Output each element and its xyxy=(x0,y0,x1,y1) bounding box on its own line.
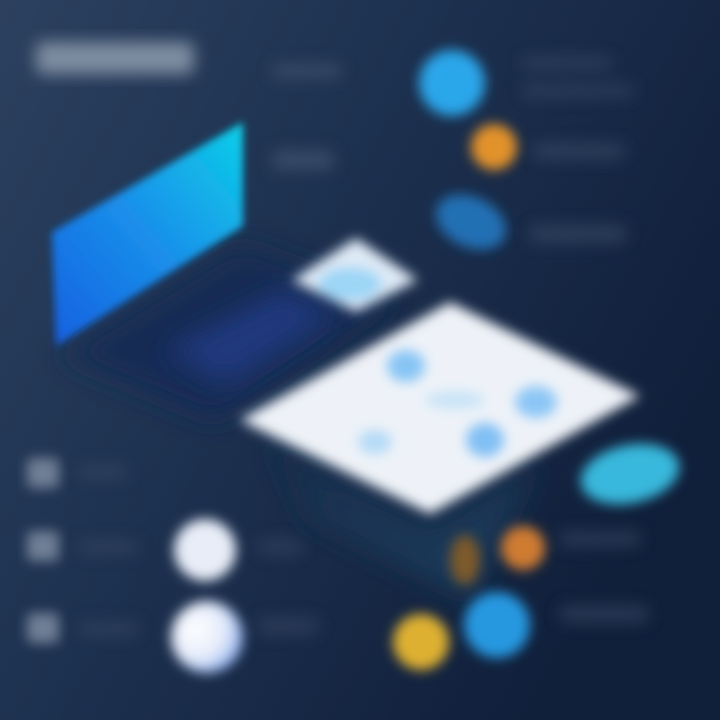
faint labels: upper middle xyxy=(272,64,342,170)
icon: blue ellipse xyxy=(427,184,515,260)
left icon squares xyxy=(27,458,59,643)
faint labels: lower right xyxy=(560,532,648,622)
title block xyxy=(36,42,194,74)
icon: orange circle xyxy=(471,124,517,170)
icon: blue circle xyxy=(419,50,485,116)
icon: dark orange bar xyxy=(450,535,480,585)
icon: orange circle lower xyxy=(501,526,545,570)
icon: blue circle lower xyxy=(464,592,530,658)
small white card xyxy=(292,238,418,312)
icon: white circle xyxy=(174,519,236,581)
cyan ellipse xyxy=(575,435,685,513)
laptop keyboard glow xyxy=(165,290,335,385)
panel nodes xyxy=(358,350,557,457)
icon: yellow circle xyxy=(393,614,449,670)
laptop base xyxy=(60,245,395,420)
shadow under large panel xyxy=(270,440,540,600)
large white isometric panel xyxy=(240,302,640,514)
laptop screen xyxy=(52,122,243,346)
faint labels: lower left xyxy=(78,465,318,636)
faint labels: upper right xyxy=(522,58,634,242)
icon: white and blue circle xyxy=(171,601,243,673)
